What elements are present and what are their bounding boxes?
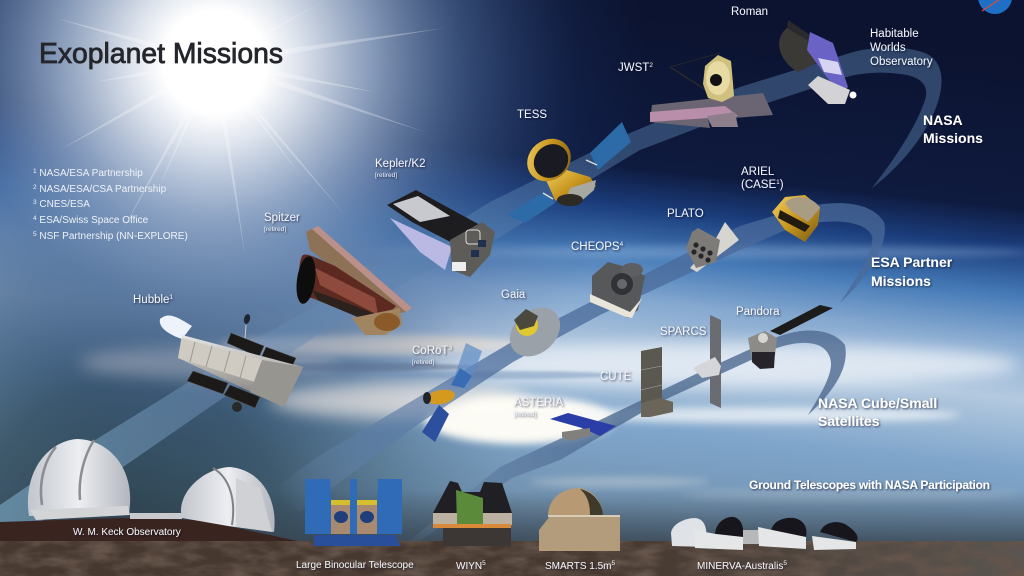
spacecraft: CHEOPS — [590, 262, 645, 318]
label: Roman: Roman — [731, 6, 768, 18]
spacecraft: Gaia — [500, 298, 570, 366]
label: CHEOPS: 4 — [620, 241, 624, 248]
label: Pandora: Pandora — [736, 306, 780, 318]
spacecraft: ARIEL — [772, 195, 820, 242]
label: TESS: TESS — [517, 109, 547, 121]
label: JWST: 2 — [649, 62, 653, 69]
telescope: Large Binocular Telescope — [305, 479, 402, 546]
label: JWST: JWST — [618, 62, 649, 74]
label: Spitzer: [retired] — [264, 226, 286, 233]
footnotes: 4 — [33, 215, 37, 222]
heading: ESA Partner Missions — [871, 254, 953, 289]
background: lower-left shaded earth — [0, 150, 600, 576]
ribbon: ESA partner missions orbit — [270, 203, 885, 512]
label: CoRoT: [retired] — [412, 359, 434, 366]
heading: NASA Cube/Small Satellites: Satellites — [818, 413, 880, 429]
heading: NASA Missions — [923, 112, 983, 146]
label: CHEOPS: CHEOPS — [571, 241, 620, 253]
footnotes: NSF Partnership (NN-EXPLORE) — [37, 231, 188, 242]
label: PLATO: PLATO — [667, 208, 704, 220]
label: CoRoT: CoRoT — [412, 345, 448, 357]
spacecraft: TESS — [507, 122, 631, 223]
footnotes: CNES/ESA — [37, 199, 90, 210]
label: Kepler/K2 — [375, 158, 426, 179]
label: WIYN: 5 — [482, 560, 486, 567]
label: Habitable Worlds Observatory: Habitable — [870, 28, 919, 40]
footnotes: 2 — [33, 184, 37, 191]
background: horizon haze — [0, 490, 1024, 550]
footnotes: ESA/Swiss Space Office — [37, 215, 149, 226]
footnotes: NASA/ESA/CSA Partnership — [37, 184, 167, 195]
heading: ESA Partner Missions: ESA Partner — [871, 254, 953, 270]
label: CoRoT: 3 — [448, 345, 452, 352]
spacecraft: Kepler/K2 — [387, 190, 495, 277]
heading: NASA Cube/Small Satellites: NASA Cube/Small — [818, 395, 937, 411]
label: Large Binocular Telescope: Large Binocular Telescope — [296, 560, 414, 571]
spacecraft: ASTERIA — [550, 413, 616, 441]
heading: ESA Partner Missions: Missions — [871, 273, 931, 289]
footnotes — [33, 168, 188, 242]
background: sun glow — [0, 0, 700, 500]
label: CUTE: CUTE — [600, 371, 632, 383]
ribbon: NASA cube and small satellites orbit — [400, 330, 846, 552]
label: W. M. Keck Observatory: W. M. Keck Observatory — [73, 527, 181, 538]
spacecraft: Pandora — [748, 305, 833, 369]
label: ASTERIA — [514, 397, 564, 418]
spacecraft: SPARCS — [693, 315, 721, 408]
spacecraft: CoRoT — [422, 343, 482, 442]
label: ARIEL (CASE): ARIEL — [741, 166, 775, 178]
label: Gaia: Gaia — [501, 289, 526, 301]
heading: NASA Cube/Small Satellites — [818, 395, 937, 429]
heading: NASA Missions: NASA — [923, 112, 963, 128]
ground: summit slope — [0, 518, 330, 552]
label: MINERVA-Australis: MINERVA-Australis — [697, 561, 783, 572]
ground: rocks — [0, 541, 1024, 576]
label: SMARTS 1.5m: SMARTS 1.5m — [545, 561, 612, 572]
heading: Ground Telescopes with NASA Participation: Ground Telescopes with NASA Participation — [749, 478, 990, 492]
label: ARIEL (CASE): 1 — [776, 179, 780, 186]
footnotes: 3 — [33, 199, 37, 206]
spacecraft: Hubble — [160, 313, 303, 412]
footnotes: 1 — [33, 168, 37, 175]
label: Habitable Worlds Observatory — [870, 28, 933, 68]
label: Hubble: Hubble — [133, 294, 169, 306]
label: SMARTS 1.5m: 5 — [612, 560, 616, 567]
NASA logo — [978, 0, 1012, 14]
label: CoRoT — [412, 345, 452, 366]
title: Exoplanet Missions — [39, 38, 283, 70]
label: WIYN: WIYN — [456, 561, 482, 572]
label: Kepler/K2: Kepler/K2 — [375, 158, 426, 170]
spacecraft: Roman — [779, 20, 856, 104]
label: ARIEL (CASE): ) — [780, 179, 784, 191]
label: SPARCS: SPARCS — [660, 326, 707, 338]
label: ASTERIA: [retired] — [514, 411, 536, 418]
label: Kepler/K2: [retired] — [375, 172, 397, 179]
telescope: WIYN — [433, 481, 512, 546]
spacecraft: CUTE — [641, 347, 673, 417]
footnotes: NASA/ESA Partnership — [37, 168, 143, 179]
spacecraft: PLATO — [686, 222, 739, 272]
label: Spitzer — [264, 212, 300, 233]
label: Spitzer: Spitzer — [264, 212, 300, 224]
label: Hubble: 1 — [169, 294, 173, 301]
sun rays — [55, 0, 445, 255]
footnotes: 5 — [33, 231, 37, 238]
telescope: SMARTS 1.5m — [539, 488, 620, 551]
telescope: W. M. Keck Observatory — [28, 439, 275, 532]
label: ASTERIA: ASTERIA — [514, 397, 564, 409]
ribbon: NASA missions orbit — [0, 47, 942, 548]
telescope: MINERVA-Australis — [671, 517, 858, 550]
spacecraft: JWST — [650, 53, 773, 128]
label: Habitable Worlds Observatory: Observatory — [870, 56, 933, 68]
label: MINERVA-Australis: 5 — [783, 560, 787, 567]
spacecraft: Spitzer — [294, 226, 412, 335]
label: Habitable Worlds Observatory: Worlds — [870, 42, 906, 54]
background: cloud bands — [80, 246, 1024, 502]
heading: NASA Missions: Missions — [923, 130, 983, 146]
label: ARIEL (CASE): (CASE — [741, 179, 776, 191]
label: ARIEL (CASE) — [741, 166, 784, 191]
